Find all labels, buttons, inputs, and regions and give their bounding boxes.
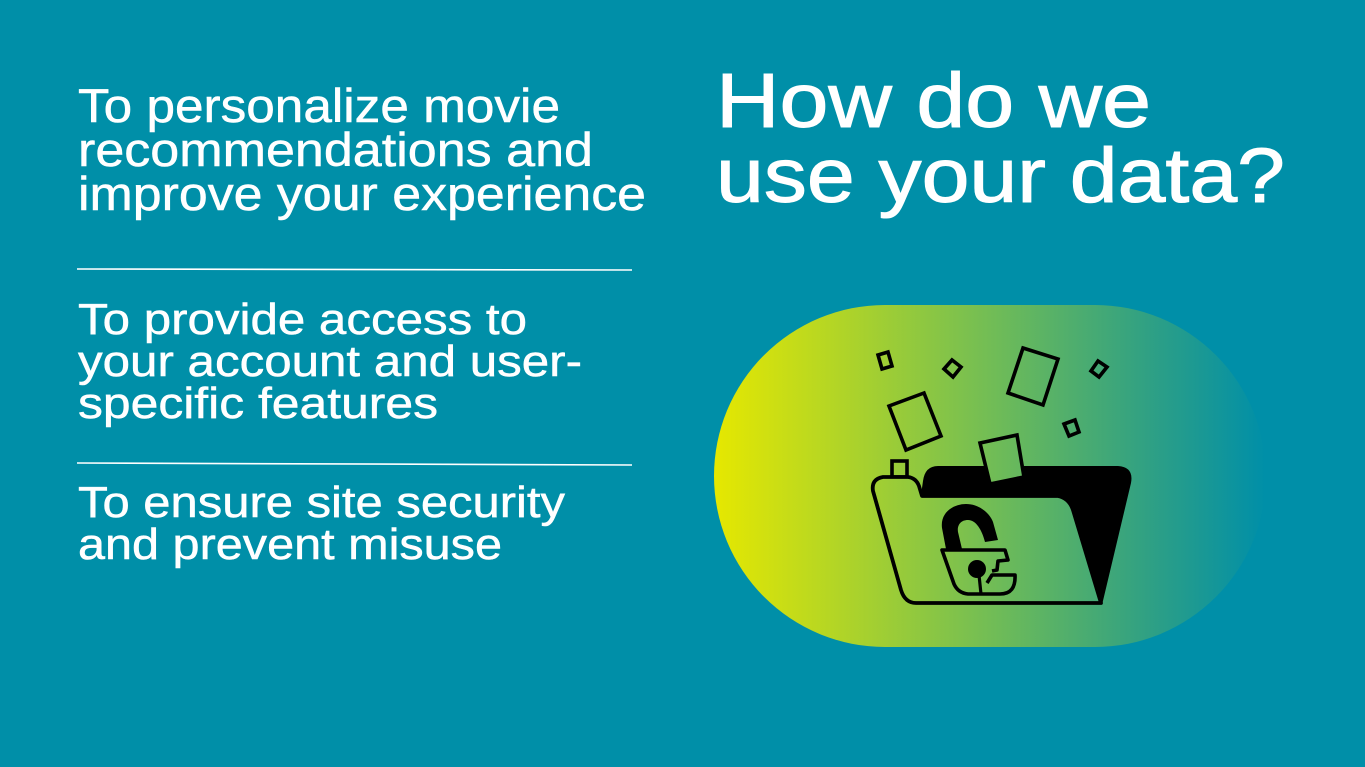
reason 2: account access [78, 295, 582, 428]
reason 2: account access: To provide access to [78, 295, 527, 344]
icon: open folder with unlocked padlock and flying documents [873, 348, 1131, 605]
icon: flying documents [878, 348, 1107, 477]
icon: folder back [921, 466, 1131, 605]
reason 3: site security: and prevent misuse [78, 520, 502, 569]
reason 3: site security: To ensure site security [78, 478, 565, 527]
icon: document entering folder [980, 435, 1024, 484]
reason 2: account access: specific features [78, 379, 438, 428]
reason 3: site security [78, 478, 565, 569]
reason 1: personalization: recommendations and [78, 123, 593, 176]
reason 1: personalization [78, 79, 646, 220]
gradient pill [714, 305, 1266, 647]
title [716, 58, 1285, 219]
reason 2: account access: your account and user- [78, 337, 582, 386]
title: How do we [716, 58, 1151, 144]
icon: folder front [873, 477, 1101, 603]
icon: unlocked padlock [942, 504, 1015, 594]
reason 1: personalization: improve your experience [78, 167, 646, 220]
title: use your data? [716, 133, 1285, 219]
reason 1: personalization: To personalize movie [78, 79, 560, 132]
